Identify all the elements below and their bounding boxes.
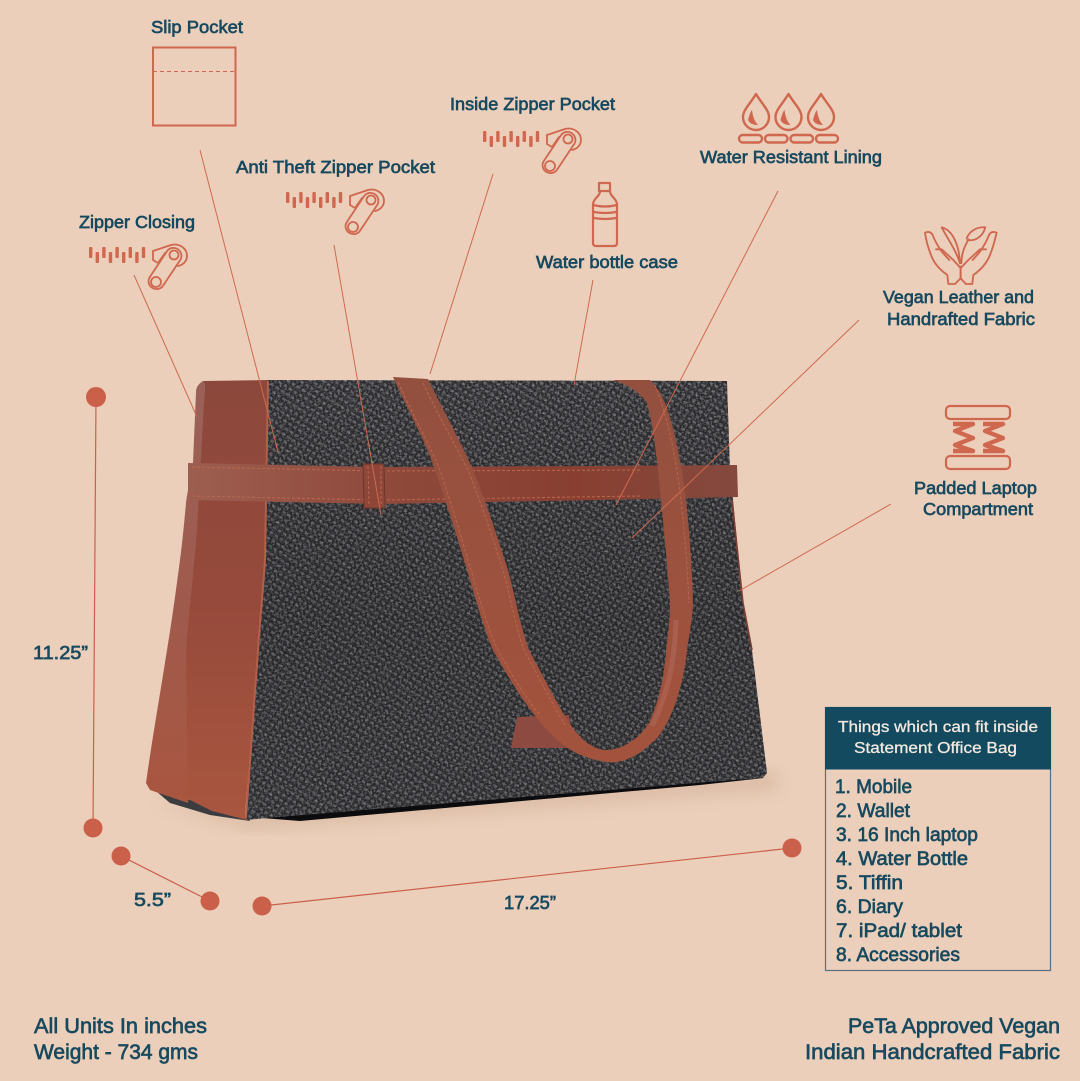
product photo: tote bag — [146, 377, 780, 830]
label: padded laptop compartment: Padded Laptop — [914, 478, 1037, 498]
label: vegan leather and handcrafted fabric — [883, 287, 1035, 329]
icon: water bottle — [593, 183, 617, 246]
icon: inside zipper — [483, 129, 581, 173]
back belt strap — [188, 463, 738, 504]
label: padded laptop compartment — [914, 478, 1037, 519]
footer: units and weight: All Units In inches — [34, 1014, 207, 1038]
leather panel edge — [246, 381, 268, 818]
list of items: 7. iPad/ tablet — [836, 920, 963, 942]
icon: slip pocket — [153, 48, 236, 126]
panel header: Things which can fit inside — [838, 719, 1038, 736]
label: inside zipper pocket: Inside Zipper Pocket — [450, 94, 615, 114]
label: padded laptop compartment: Compartment — [923, 499, 1033, 519]
label: water resistant lining: Water Resistant Lining — [700, 147, 882, 167]
dark contact shadow — [262, 778, 764, 821]
list of items: 1. Mobile — [835, 776, 912, 798]
leader lines — [134, 150, 891, 591]
label: anti theft zipper pocket: Anti Theft Zipper Pocket — [236, 157, 435, 177]
list of items: 4. Water Bottle — [836, 848, 968, 870]
icon: water drops — [739, 94, 838, 142]
shoulder strap — [393, 377, 693, 762]
dimension: depth — [112, 846, 220, 910]
label: slip pocket: Slip Pocket — [151, 17, 243, 37]
logo patch — [511, 715, 575, 748]
panel: things which can fit inside — [825, 707, 1051, 970]
list of items: 3. 16 Inch laptop — [836, 824, 978, 846]
fabric underside sliver — [150, 786, 250, 821]
dimension: width — [252, 838, 802, 916]
icon: zipper closing — [89, 245, 187, 289]
list of items — [835, 776, 978, 966]
label: vegan leather and handcrafted fabric: Vegan Leather and — [883, 287, 1034, 307]
belt loop — [363, 464, 385, 508]
list of items: 2. Wallet — [836, 800, 911, 822]
label: vegan leather and handcrafted fabric: Handrafted Fabric — [887, 309, 1035, 329]
icon: anti theft zipper — [286, 190, 384, 234]
footer: material claims — [805, 1014, 1060, 1064]
label: water bottle case: Water bottle case — [536, 252, 678, 272]
bag ground shadow — [150, 770, 780, 830]
dimension label: width: 17.25” — [504, 892, 556, 913]
dimension: height — [84, 387, 106, 838]
footer: material claims: Indian Handcrafted Fabric — [805, 1040, 1060, 1064]
front leather panel — [186, 380, 268, 820]
panel header — [825, 707, 1051, 770]
list of items: 6. Diary — [836, 896, 903, 918]
label: zipper closing: Zipper Closing — [79, 212, 195, 232]
footer: units and weight — [34, 1014, 207, 1064]
icon: padded springs — [946, 406, 1010, 469]
footer: units and weight: Weight - 734 gms — [34, 1040, 198, 1064]
footer: material claims: PeTa Approved Vegan — [848, 1014, 1060, 1038]
dimension label: height: 11.25” — [33, 642, 88, 663]
panel header: Statement Office Bag — [854, 740, 1017, 757]
list of items: 8. Accessories — [836, 944, 960, 966]
icon: hands with leaves — [925, 227, 997, 284]
belt stitching — [192, 467, 640, 500]
fabric body — [240, 378, 770, 823]
side leather panel — [146, 381, 205, 803]
dimension label: depth: 5.5” — [134, 889, 171, 910]
list of items: 5. Tiffin — [836, 872, 903, 894]
